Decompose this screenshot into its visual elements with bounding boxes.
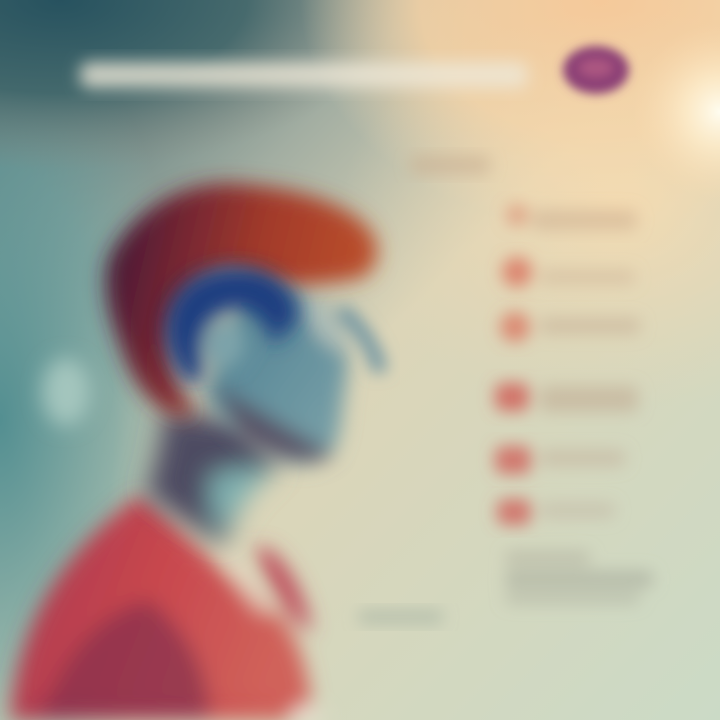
left side glow icon [42, 358, 90, 426]
badge: purple emblem [563, 46, 629, 94]
list: item 5 [495, 446, 625, 474]
hair [106, 183, 377, 417]
title [80, 62, 528, 88]
face [205, 280, 348, 465]
neck [145, 410, 280, 545]
caption [358, 610, 443, 624]
list: item 6 [497, 499, 615, 525]
illustration: person in profile [10, 183, 380, 720]
list: item 3 [500, 312, 640, 342]
shirt [10, 495, 330, 720]
list: item 2 [502, 257, 635, 287]
text block: closing note [505, 551, 653, 604]
headphone: blue ear cup [165, 267, 298, 385]
glasses arm [340, 310, 380, 372]
subheading [410, 156, 490, 174]
list: item 4 [495, 383, 638, 412]
list: item 1 [506, 204, 637, 230]
